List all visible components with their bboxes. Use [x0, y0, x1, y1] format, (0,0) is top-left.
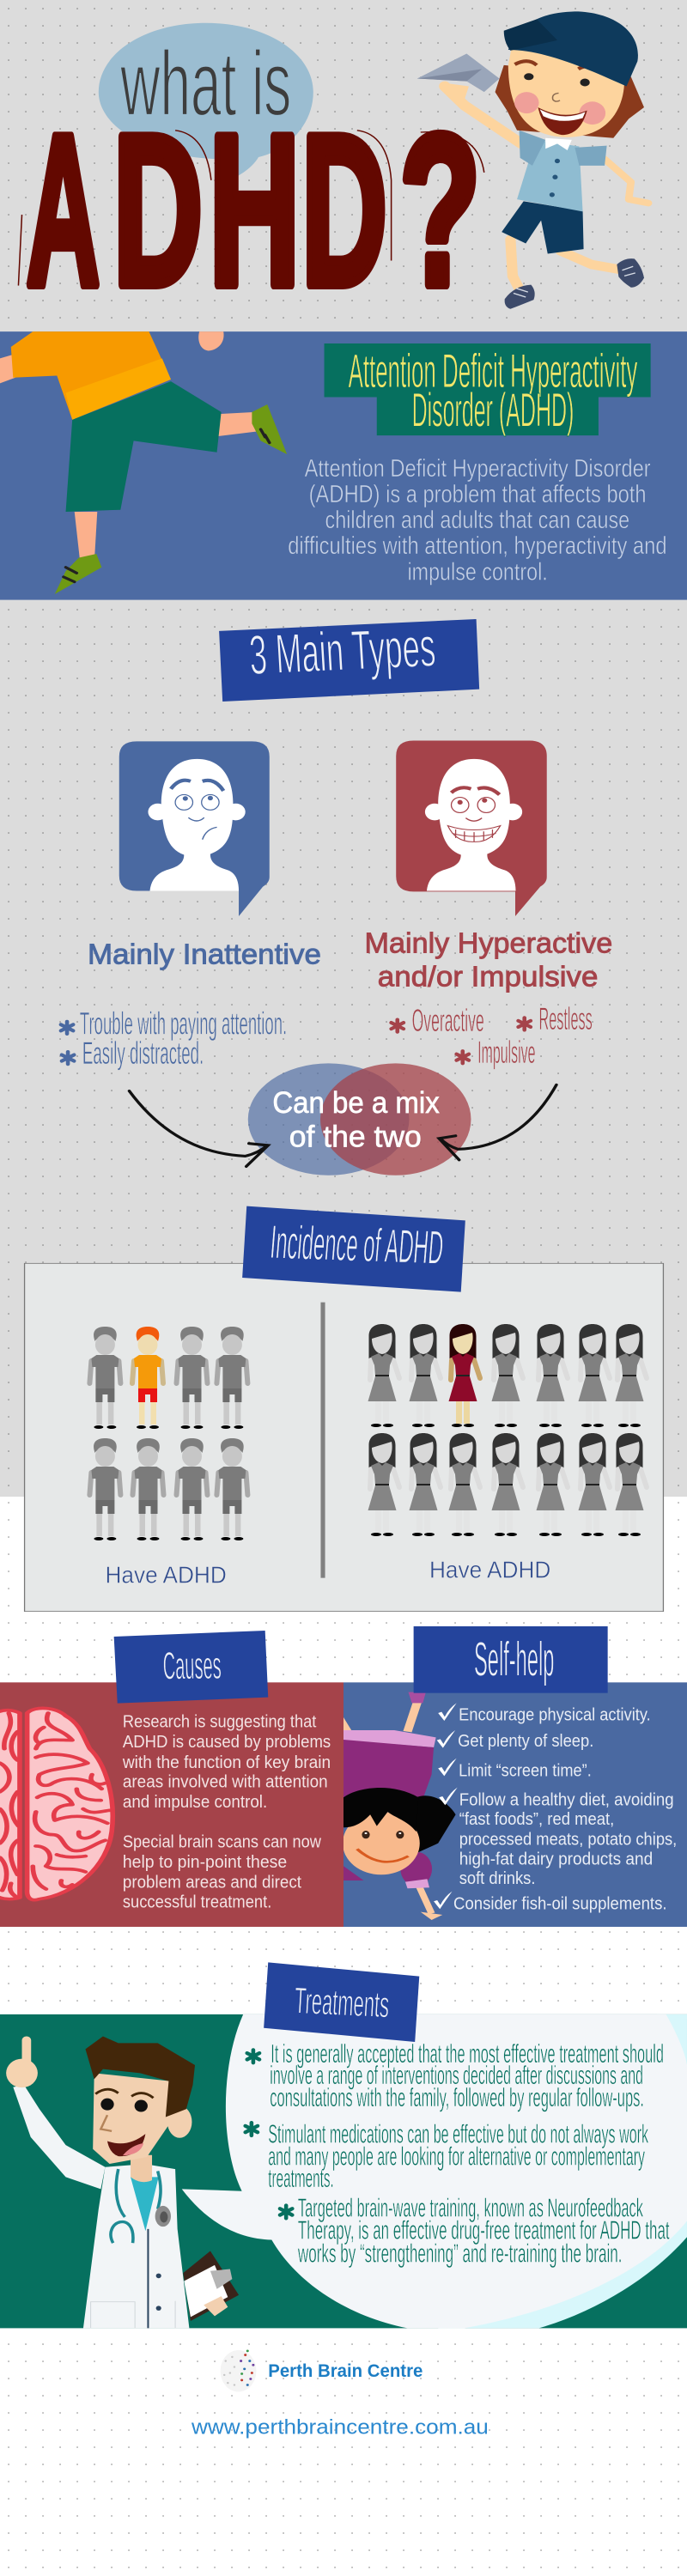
text block: ADHD definition: impulse control. — [407, 558, 548, 586]
text block: causes: successful treatment. — [123, 1892, 271, 1911]
list: self-help tips: soft drinks. — [459, 1868, 535, 1888]
heading: Attention Deficit Hyperactivity Disorder — [325, 343, 651, 437]
icon: Perth Brain Centre logo — [221, 2350, 256, 2391]
text block: causes: and impulse control. — [123, 1791, 267, 1812]
arrow: right to venn — [439, 1084, 556, 1160]
banner: Treatments: Treatments — [294, 1979, 391, 2026]
icon: inattentive face — [119, 741, 270, 916]
speech bubble with "what is": what is — [120, 33, 291, 135]
text block: causes: ADHD is caused by problems — [123, 1731, 331, 1752]
banner: Self-help — [414, 1626, 608, 1693]
character: doctor — [6, 2037, 239, 2328]
text block: causes: Research is suggesting that — [123, 1711, 317, 1731]
title: ADHD? — [18, 90, 484, 330]
arrow: left to venn — [130, 1091, 268, 1166]
icons: bullets — [246, 2050, 292, 2218]
chart: boys pictogram, 1 in 8 — [89, 1327, 247, 1540]
banner: Causes: Causes — [162, 1643, 222, 1687]
label: Mainly Hyperactive and/or Impulsive — [364, 927, 612, 993]
venn diagram: can be a mix of the two — [248, 1063, 471, 1176]
section: 3 main types: Trouble with paying attention. — [80, 1006, 287, 1042]
speech bubble — [182, 2014, 687, 2328]
venn diagram: can be a mix of the two: Can be a mix — [272, 1085, 440, 1119]
banner: Treatments — [264, 1962, 419, 2042]
panel: blue definition band — [0, 331, 687, 600]
title: ADHD?: A — [27, 90, 100, 330]
title: ADHD?: ? — [399, 90, 481, 330]
list: self-help tips: Get plenty of sleep. — [458, 1730, 593, 1751]
text block: causes: Special brain scans can now — [123, 1832, 321, 1851]
list: self-help tips: Limit “screen time”. — [459, 1760, 592, 1780]
character: running child legs — [0, 331, 287, 594]
icons: check marks — [434, 1703, 458, 1909]
panel: self-help — [343, 1682, 687, 1927]
panel: incidence background — [25, 1263, 663, 1612]
list: inattentive symptoms: Easily distracted. — [82, 1036, 204, 1071]
section: 3 main types — [61, 616, 612, 1176]
website url: www.perthbraincentre.com.au — [191, 2415, 489, 2439]
panel: causes — [0, 1682, 344, 1927]
section: treatments and footer — [0, 1962, 687, 2439]
character: boy with paper plane — [417, 11, 648, 309]
banner: Incidence of ADHD — [242, 1206, 465, 1292]
title: ADHD?: D — [301, 90, 387, 330]
section: incidence — [25, 1206, 663, 1612]
logo text: Perth Brain Centre: Perth Brain Centre — [268, 2360, 423, 2381]
text block: treatments — [268, 2038, 670, 2268]
text block: causes — [122, 1711, 331, 1911]
list: hyperactive symptoms: Overactive — [412, 1003, 484, 1038]
label: Mainly Hyperactive and/or Impulsive: Mainly Hyperactive — [364, 927, 612, 959]
text block: causes: with the function of key brain — [122, 1752, 331, 1772]
banner: 3 Main Types — [219, 616, 479, 702]
speech bubble with "what is" — [99, 23, 313, 182]
label: Mainly Inattentive: Mainly Inattentive — [88, 939, 321, 970]
banner: 3 Main Types: 3 Main Types — [247, 616, 437, 686]
list: self-help tips — [453, 1704, 677, 1913]
text block: causes: problem areas and direct — [123, 1872, 301, 1892]
icon: brain — [0, 1708, 112, 1900]
title: ADHD?: H — [209, 90, 300, 330]
label: girls have ADHD: Have ADHD — [429, 1557, 550, 1583]
character: upside-down girl — [343, 1692, 456, 1920]
section: hero and ADHD definition — [0, 11, 687, 600]
list: inattentive symptoms — [61, 1006, 287, 1071]
text block: causes: areas involved with attention — [123, 1771, 328, 1791]
label: Mainly Hyperactive and/or Impulsive: and/or Impulsive — [378, 961, 598, 993]
chart: girls pictogram, 1 in 14 — [368, 1324, 647, 1536]
list: hyperactive symptoms — [392, 1001, 593, 1070]
text block: ADHD definition — [288, 455, 667, 586]
text block: treatments: treatments. — [268, 2163, 334, 2193]
venn diagram: can be a mix of the two: of the two — [289, 1120, 422, 1153]
section: 3 main types: Restless — [539, 1001, 593, 1036]
label: boys have ADHD: Have ADHD — [105, 1562, 227, 1588]
section: causes and self-help — [0, 1626, 687, 1927]
banner: Causes — [114, 1631, 268, 1704]
text block: causes: help to pin-point these — [123, 1851, 287, 1872]
panel: treatments — [0, 2014, 687, 2328]
title: ADHD?: D — [113, 90, 203, 330]
icon: hyperactive face — [396, 740, 547, 916]
list: hyperactive symptoms: Impulsive — [477, 1035, 535, 1070]
